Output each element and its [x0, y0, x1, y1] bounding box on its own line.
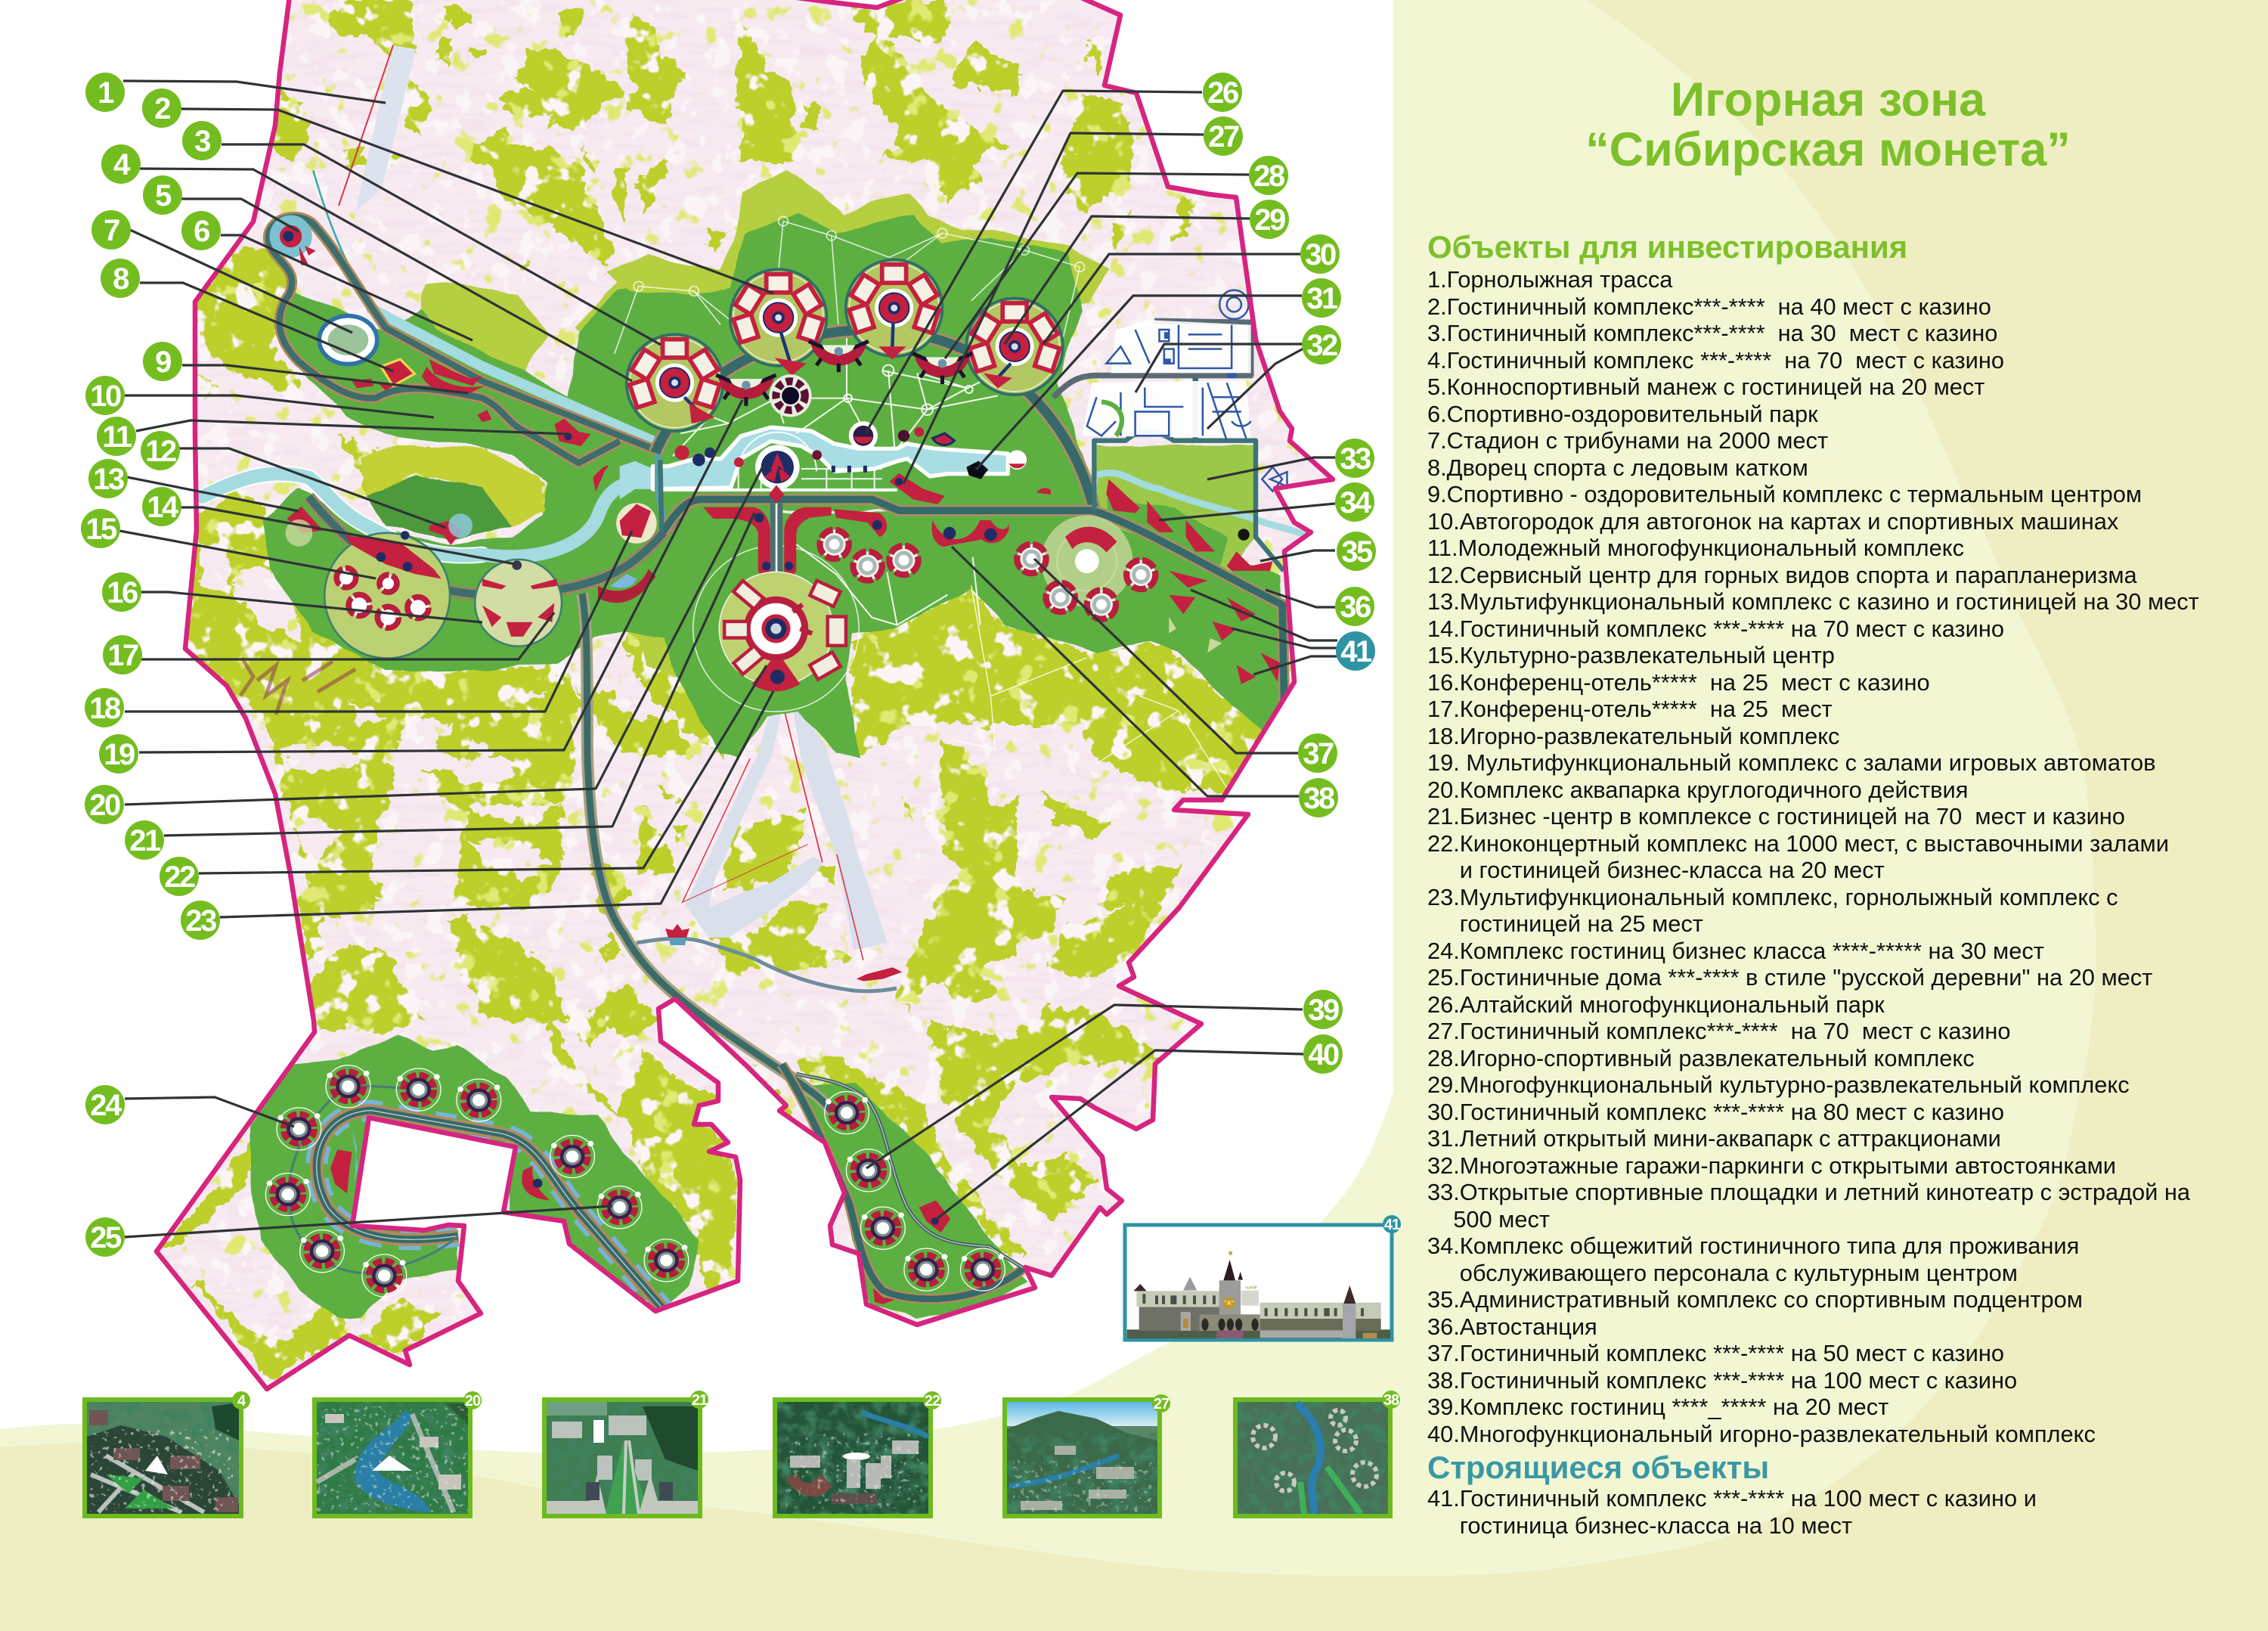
badge 41: 41: [1384, 1217, 1400, 1233]
ski run 1: [339, 45, 416, 212]
castle drawing: "А": [1224, 1300, 1235, 1307]
numbered map markers: 27: [1208, 120, 1239, 153]
numbered map markers: 25: [90, 1221, 122, 1254]
numbered map markers: 8: [113, 262, 129, 296]
masterplan buildings: north arc: [627, 260, 1063, 504]
thumbnail number badges: 20: [465, 1393, 481, 1409]
green park areas: [251, 169, 1284, 1318]
numbered map markers: 11: [102, 420, 132, 454]
castle drawing: "АЛТЙ": [1244, 1284, 1258, 1289]
map boundary: [156, 0, 1333, 1389]
thumbnail number badges: 38: [1383, 1392, 1399, 1409]
thumbnail number badges: 22: [925, 1393, 940, 1409]
map of the zone: [0, 0, 1512, 1437]
numbered map markers: [81, 73, 1376, 1257]
numbered map markers: 28: [1253, 160, 1285, 193]
terrain: yellow-green vegetation patches: [159, 0, 1275, 1383]
numbered map markers: 20: [89, 789, 120, 822]
thumbnail: view of object 22: [775, 1400, 931, 1516]
panel: building illustration 41: [1125, 1215, 1401, 1340]
numbered map markers: 2: [154, 92, 170, 126]
river through the central park: [620, 427, 1008, 499]
numbered map markers: 18: [89, 692, 121, 725]
numbered map markers: 7: [104, 214, 119, 247]
masterplan buildings: central and southern blocks: [703, 479, 1280, 691]
castle drawing: [1127, 1251, 1390, 1338]
numbered map markers: 39: [1308, 994, 1339, 1027]
rivers and ponds: [203, 171, 1309, 557]
numbered map markers: 13: [93, 463, 124, 496]
thumbnail: view of object 27: [1005, 1400, 1160, 1516]
numbered map markers: 15: [85, 513, 117, 546]
terrain: hand-placed clearings in the vegetation: [197, 540, 564, 882]
numbered map markers: 37: [1303, 737, 1334, 771]
numbered map markers: 10: [90, 380, 121, 413]
terrain: eroded slopes: [240, 658, 355, 715]
numbered map markers: 17: [107, 639, 138, 672]
heading: objects for investment: Объекты для инвестирования: [1427, 229, 1907, 265]
numbered map markers: 29: [1254, 203, 1285, 237]
numbered map markers: 23: [185, 904, 216, 938]
numbered map markers: 12: [145, 435, 176, 468]
numbered map markers: 24: [90, 1089, 122, 1122]
white park paths: [615, 216, 1227, 788]
thumbnail number badges: [232, 1391, 1400, 1412]
title: Игорная зона: [1671, 73, 1985, 126]
numbered map markers: 30: [1305, 238, 1336, 271]
list of objects 1–40: 1.Горнолыжная трасса 2.Гостиничный комплекс***-**** на 40 мест с казино 3.Гостиничный комплекс***-**** на 30 мест с казино 4.Гостиничный комплекс ***-**** на 70 мест с казино 5.Конноспортивный манеж с гостиницей на 20 мест 6.Спортивно-оздоровительный парк 7.Стадион с трибунами на 2000 мест 8.Дворец спорта с ледовым катком 9.Спортивно - оздоровительный комплекс с термальным центром 10.Автогородок для автогонок на картах и спортивных машинах 11.Молодежный многофункциональный комплекс 12.Сервисный центр для горных видов спорта и парапланеризма 13.Мультифункциональный комплекс с казино и гостиницей на 30 мест 14.Гостиничный комплекс ***-**** на 70 мест с казино 15.Культурно-развлекательный центр 16.Конференц-отель***** на 25 мест с казино 17.Конференц-отель***** на 25 мест 18.Игорно-развлекательный комплекс 19. Мультифункциональный комплекс с залами игровых автоматов 20.Комплекс аквапарка круглогодичного действия 21.Бизнес -центр в комплексе с гостиницей на 70 мест и казино 22.Киноконцертный комплекс на 1000 мест, с выставочными залами и гостиницей бизнес-класса на 20 мест 23.Мультифункциональный комплекс, горнолыжный комплекс с гостиницей на 25 мест 24.Комплекс гостиниц бизнес класса ****-***** на 30 мест 25.Гостиничные дома ***-**** в стиле "русской деревни" на 20 мест 26.Алтайский многофункциональный парк 27.Гостиничный комплекс***-**** на 70 мест с казино 28.Игорно-спортивный развлекательный комплекс 29.Многофункциональный культурно-развлекательный комплекс 30.Гостиничный комплекс ***-**** на 80 мест с казино 31.Летний открытый мини-аквапарк с аттракционами 32.Многоэтажные гаражи-паркинги с открытыми автостоянками 33.Открытые спортивные площадки и летний кинотеатр с эстрадой на 500 мест 34.Комплекс общежитий гостиничного типа для проживания обслуживающего персонала с культурным центром 35.Административный комплекс со спортивным подцентром 36.Автостанция 37.Гостиничный комплекс ***-**** на 50 мест с казино 38.Гостиничный комплекс ***-**** на 100 мест с казино 39.Комплекс гостиниц ****_***** на 20 мест 40.Многофункциональный игорно-развлекательный комплекс: [1427, 266, 2199, 1447]
numbered map markers: 6: [194, 215, 209, 248]
numbered map markers: 9: [155, 346, 171, 379]
central park path network: [673, 333, 998, 625]
terrain base: [160, 0, 1328, 1384]
numbered map markers: 16: [107, 576, 138, 609]
thumbnail number badges: 4: [237, 1393, 246, 1409]
numbered map markers: 4: [113, 148, 131, 181]
numbered map markers: 31: [1306, 282, 1338, 315]
masterplan: blueprint garage district: [1082, 290, 1287, 491]
leader lines: [119, 81, 1337, 1237]
roads: [268, 217, 1284, 1309]
list item 41: 41.Гостиничный комплекс ***-**** на 100 мест с казино и гостиница бизнес-класса на 10 мест: [1427, 1485, 2037, 1538]
numbered map markers: 33: [1340, 442, 1371, 476]
thumbnail: view of object 4: [85, 1400, 241, 1516]
masterplan buildings: southeast parcel: [825, 967, 1005, 1304]
numbered map markers: 35: [1341, 535, 1373, 569]
thumbnail: view of object 38: [1235, 1400, 1390, 1516]
numbered map markers: 26: [1207, 76, 1238, 110]
numbered map markers: 19: [104, 738, 135, 771]
numbered map markers: 36: [1340, 591, 1371, 624]
numbered map markers: 41: [1340, 635, 1372, 668]
title: “Сибирская монета”: [1585, 123, 2071, 176]
thumbnail: view of object 20: [314, 1400, 470, 1516]
numbered map markers: 5: [155, 179, 172, 212]
numbered map markers: 21: [129, 824, 161, 857]
masterplan buildings: west parks: [270, 215, 657, 659]
numbered map markers: 40: [1308, 1038, 1339, 1071]
heading: objects under construction: Строящиеся объекты: [1427, 1450, 1769, 1485]
thumbnail number badges: 27: [1154, 1396, 1170, 1412]
numbered map markers: 32: [1306, 329, 1337, 362]
numbered map markers: 34: [1340, 486, 1372, 519]
numbered map markers: 14: [147, 491, 179, 524]
terrain: fractal mottling: [178, 0, 1300, 1385]
thumbnail number badges: 21: [692, 1392, 708, 1409]
numbered map markers: 1: [98, 76, 114, 110]
title: [1585, 73, 2071, 176]
numbered map markers: 38: [1303, 782, 1335, 815]
numbered map markers: 3: [194, 125, 210, 158]
numbered map markers: 22: [164, 860, 195, 894]
thumbnail: view of object 21: [544, 1400, 700, 1516]
ski base station: [665, 924, 689, 945]
masterplan buildings: southwest parcel: [265, 1065, 689, 1297]
ski slopes: [683, 698, 888, 960]
